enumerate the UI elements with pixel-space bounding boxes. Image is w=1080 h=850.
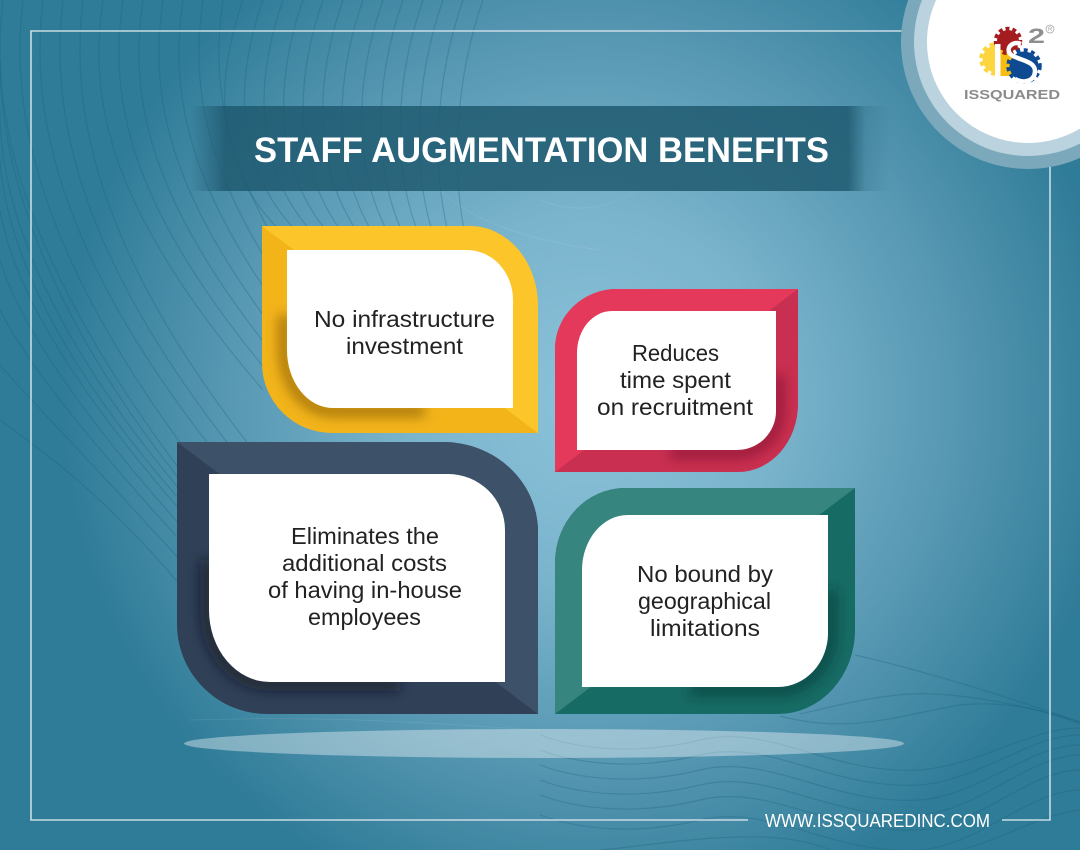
logo badge — [901, 0, 1080, 169]
title banner — [190, 106, 890, 191]
text: No infrastructure — [314, 306, 495, 332]
podium ellipse — [184, 729, 904, 758]
text: limitations — [650, 615, 760, 641]
panel: no bound by geographical limitations — [555, 488, 855, 714]
text: geographical — [638, 588, 771, 614]
text: on recruitment — [597, 394, 753, 420]
icon: gears logo: 2 — [1028, 25, 1045, 48]
text: No bound by — [637, 561, 773, 587]
text: of having in-house — [268, 577, 462, 603]
text: additional costs — [282, 550, 447, 576]
website url: WWW.ISSQUAREDINC.COM — [765, 810, 990, 831]
text: Reduces — [632, 340, 719, 366]
panel: eliminates additional costs — [177, 442, 538, 714]
title: STAFF AUGMENTATION BENEFITS — [254, 131, 829, 170]
text: investment — [346, 333, 463, 359]
text: time spent — [620, 367, 731, 393]
text: Eliminates the — [291, 523, 439, 549]
panel: reduces time spent on recruitment — [555, 289, 798, 472]
icon: gears logo: R — [1048, 27, 1053, 33]
icon: gears logo: ISSQUARED — [964, 88, 1060, 102]
icon: gears logo — [964, 25, 1060, 102]
text — [314, 306, 495, 359]
panel: no infrastructure investment — [262, 226, 538, 433]
text — [597, 340, 753, 420]
text: employees — [308, 604, 421, 630]
text — [637, 561, 773, 641]
text — [268, 523, 462, 630]
